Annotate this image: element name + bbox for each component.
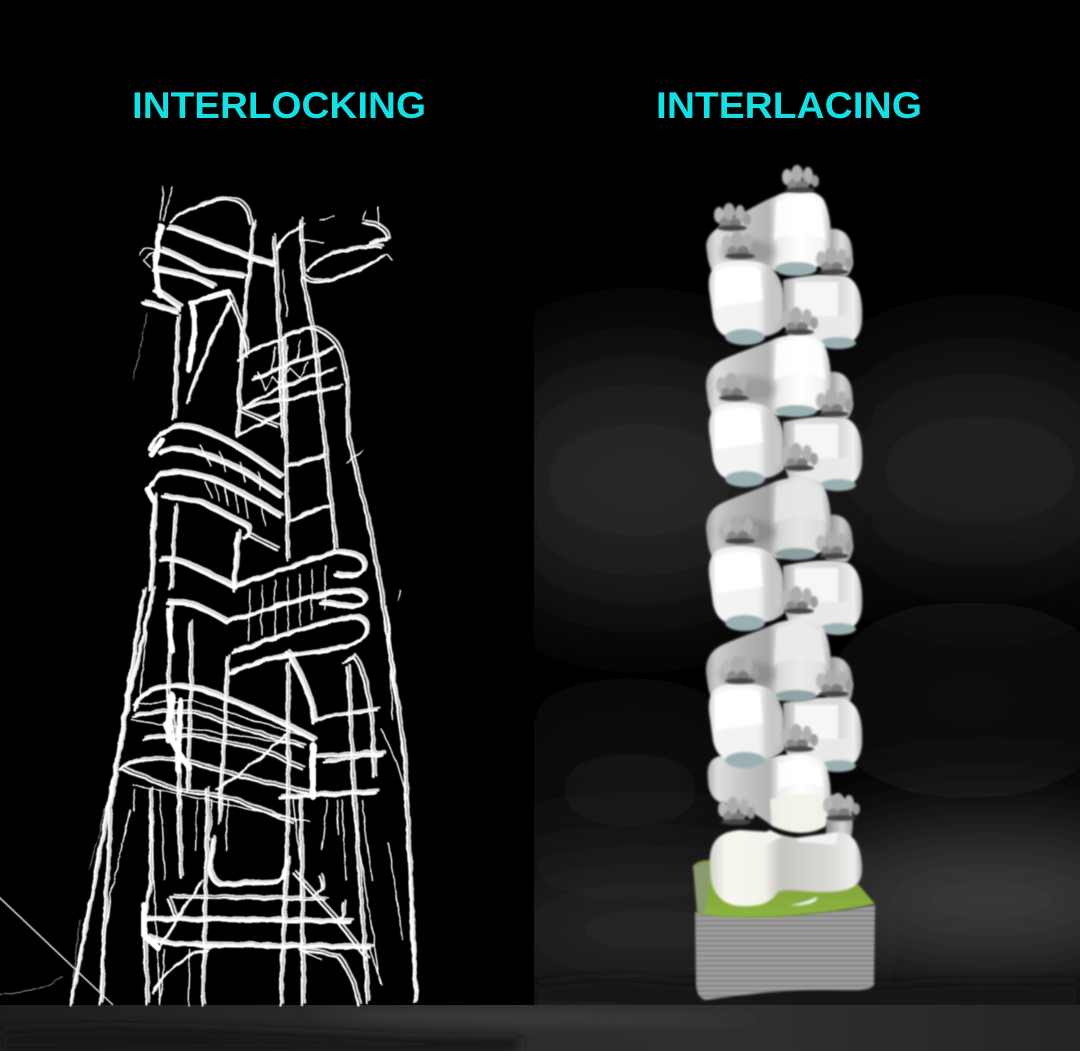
render: interlacing tower [693, 165, 875, 1000]
ground strip [0, 1005, 1080, 1051]
tower: front left modules [709, 260, 785, 768]
module: fifth lobe above the base [708, 754, 831, 833]
tower: upper stacked modules [706, 190, 831, 833]
tower: right rear modules [783, 229, 862, 842]
heading: interlocking: INTERLOCKING [132, 85, 426, 126]
tower: base peanut module [710, 830, 862, 906]
tower base: green plateau [693, 860, 875, 918]
heading: interlacing: INTERLACING [656, 85, 922, 126]
tower: planted trees [714, 165, 860, 825]
panel: interlocking black backing [0, 0, 534, 1005]
sketch: interlocking tower line drawing [0, 187, 418, 1005]
tower base: stratified earth block [695, 905, 875, 1000]
